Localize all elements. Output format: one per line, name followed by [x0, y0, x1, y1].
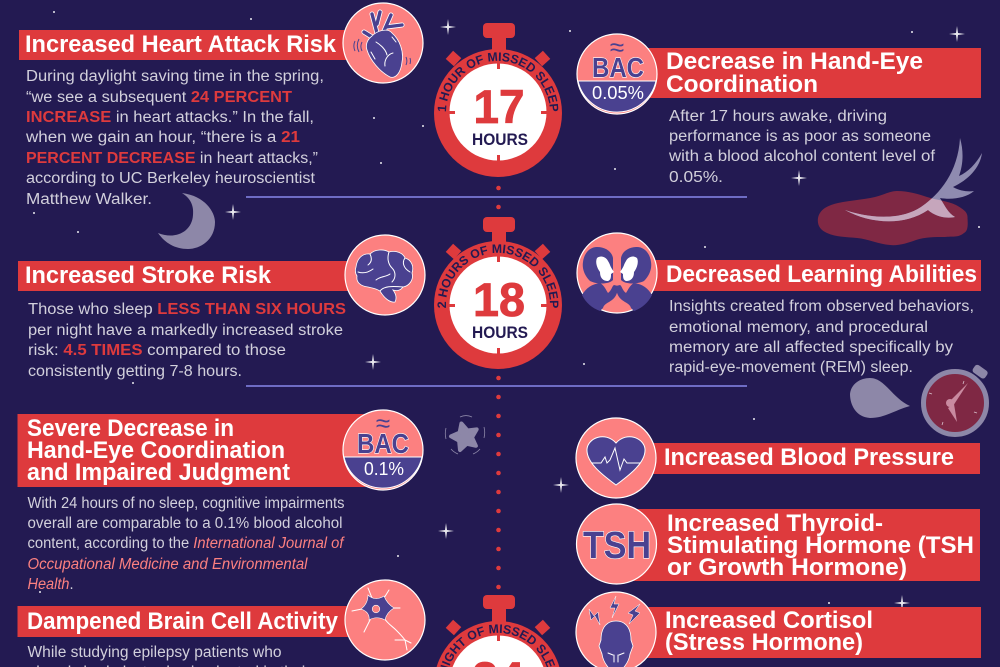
text block: hand-eye: 0.05%.: [669, 169, 723, 186]
text block: hand-eye: After 17 hours awake, driving: [669, 108, 887, 125]
icon: anatomical heart: [343, 3, 423, 83]
heading bar: blood pressure: Increased Blood Pressure: [664, 444, 954, 471]
heading bar: cortisol: Increased Cortisol: [665, 607, 873, 634]
stopwatch: 18 hours: HOURS: [472, 323, 528, 342]
panel: thyroid hormone: [576, 504, 980, 584]
text block: learning: Insights created from observed behaviors,: [669, 298, 974, 315]
heading bar: severe decrease: Hand-Eye Coordination: [27, 437, 285, 464]
text block: severe decrease: [28, 495, 345, 593]
text block: heart attack: PERCENT DECREASE in heart attacks,”: [26, 150, 318, 167]
stopwatch: 18 hours: [434, 217, 562, 369]
icon: BAC 0.05%: ≈: [610, 32, 624, 62]
panel: heart attack risk: [19, 3, 423, 208]
text block: learning: rapid-eye-movement (REM) sleep.: [669, 359, 913, 376]
icon: neuron: [345, 580, 425, 660]
text block: severe decrease: overall are comparable to a 0.1% blood alcohol: [28, 515, 342, 532]
center divider lines: [246, 196, 747, 387]
moon: [158, 193, 215, 249]
panel: hand-eye coordination: [577, 32, 981, 186]
icon: brain: [345, 235, 425, 315]
text block: heart attack: During daylight saving time in the spring,: [26, 68, 324, 85]
text block: heart attack: according to UC Berkeley neuroscientist: [26, 170, 316, 187]
text block: learning: emotional memory, and procedural: [669, 319, 928, 336]
text block: stroke: Those who sleep LESS THAN SIX HOURS: [28, 301, 346, 318]
text block: stroke: per night have a markedly increased stroke: [28, 322, 343, 339]
panel: blood pressure: [576, 418, 980, 498]
text block: brain cell: While studying epilepsy patients who: [28, 644, 282, 661]
text block: brain cell: [28, 644, 310, 667]
heading bar: cortisol: (Stress Hormone): [665, 629, 863, 656]
stopwatch: 17 hours: 1 HOUR OF MISSED SLEEP: [438, 52, 558, 112]
heading bar: brain cell: Dampened Brain Cell Activity: [27, 608, 339, 635]
heading bar: TSH: [630, 509, 980, 581]
icon: BAC 0.05%: 0.05%: [592, 83, 644, 103]
stopwatch: 17 hours: 17: [474, 80, 524, 133]
text block: severe decrease: Occupational Medicine and Environmental: [28, 556, 308, 573]
heading bar: stroke: Increased Stroke Risk: [25, 262, 272, 289]
panel: severe hand-eye decrease: [18, 408, 423, 593]
heading bar: TSH: or Growth Hormone): [667, 554, 907, 581]
text block: severe decrease: With 24 hours of no sleep, cognitive impairments: [28, 495, 345, 512]
heading bar: stroke: [18, 261, 353, 291]
text block: hand-eye: with a blood alcohol content level of: [668, 148, 936, 165]
heading bar: severe decrease: and Impaired Judgment: [27, 459, 290, 486]
panel: cortisol: [576, 592, 981, 667]
decorative stopwatch and teardrop: [850, 364, 989, 434]
icon: BAC 0.1%: [343, 408, 423, 490]
icon: BAC 0.05%: [577, 32, 657, 114]
text block: heart attack: Matthew Walker.: [26, 191, 152, 208]
panel: brain cell activity: [18, 580, 425, 667]
text block: heart attack: INCREASE in heart attacks.” In the fall,: [26, 109, 314, 126]
stopwatch: 17 hours: [434, 23, 562, 177]
panel: stroke risk: [18, 235, 425, 380]
text block: heart attack: [25, 68, 324, 208]
icon: TSH: TSH: [583, 525, 651, 567]
heading bar: severe decrease: [18, 414, 370, 487]
text block: hand-eye: performance is as poor as someone: [669, 128, 931, 145]
text block: stroke: consistently getting 7-8 hours.: [28, 363, 242, 380]
stopwatch: 18 hours: 2 HOURS OF MISSED SLEEP: [437, 244, 558, 308]
icon: BAC 0.1%: 0.1%: [364, 459, 404, 479]
icon: heart with pulse: [576, 418, 656, 498]
heading bar: TSH: Stimulating Hormone (TSH: [667, 532, 974, 559]
text block: heart attack: when we gain an hour, “there is a 21: [25, 129, 300, 146]
text block: severe decrease: Health.: [28, 576, 74, 593]
heading bar: TSH: Increased Thyroid-: [667, 510, 883, 537]
icon: BAC 0.05%: BAC: [592, 52, 644, 83]
text block: learning: memory are all affected specifically by: [669, 339, 953, 356]
text block: learning: [669, 298, 974, 376]
heading bar: hand-eye: Decrease in Hand-Eye: [666, 48, 923, 75]
icon: BAC 0.1%: BAC: [357, 428, 409, 459]
decorative star with vibration lines: [445, 416, 485, 454]
decorative sleeping blob with antlers: [818, 138, 982, 245]
heading bar: hand-eye: Coordination: [666, 71, 818, 98]
text block: stroke: [28, 301, 346, 380]
icon: BAC 0.1%: ≈: [376, 408, 390, 438]
text block: stroke: risk: 4.5 TIMES compared to those: [28, 342, 286, 359]
stopwatch: 18 hours: 18: [473, 273, 525, 326]
icon: TSH: [576, 504, 656, 584]
heading bar: hand-eye: [640, 48, 981, 98]
stopwatch: 17 hours: HOURS: [472, 130, 528, 149]
panel: learning abilities: [577, 233, 981, 376]
stopwatch: 24 hours: [436, 595, 560, 667]
text block: severe decrease: content, according to the International Journal of: [28, 535, 345, 552]
text block: heart attack: “we see a subsequent 24 PERCENT: [26, 89, 293, 106]
text block: hand-eye: [668, 108, 936, 186]
heading bar: heart attack: Increased Heart Attack Risk: [25, 31, 337, 58]
icon: two faces: [577, 233, 657, 313]
heading bar: severe decrease: Severe Decrease in: [27, 415, 234, 442]
heading bar: learning: Decreased Learning Abilities: [666, 261, 977, 288]
heading bar: cortisol: [638, 607, 981, 658]
icon: stressed head: [576, 592, 656, 667]
dotted timeline: [496, 186, 501, 589]
